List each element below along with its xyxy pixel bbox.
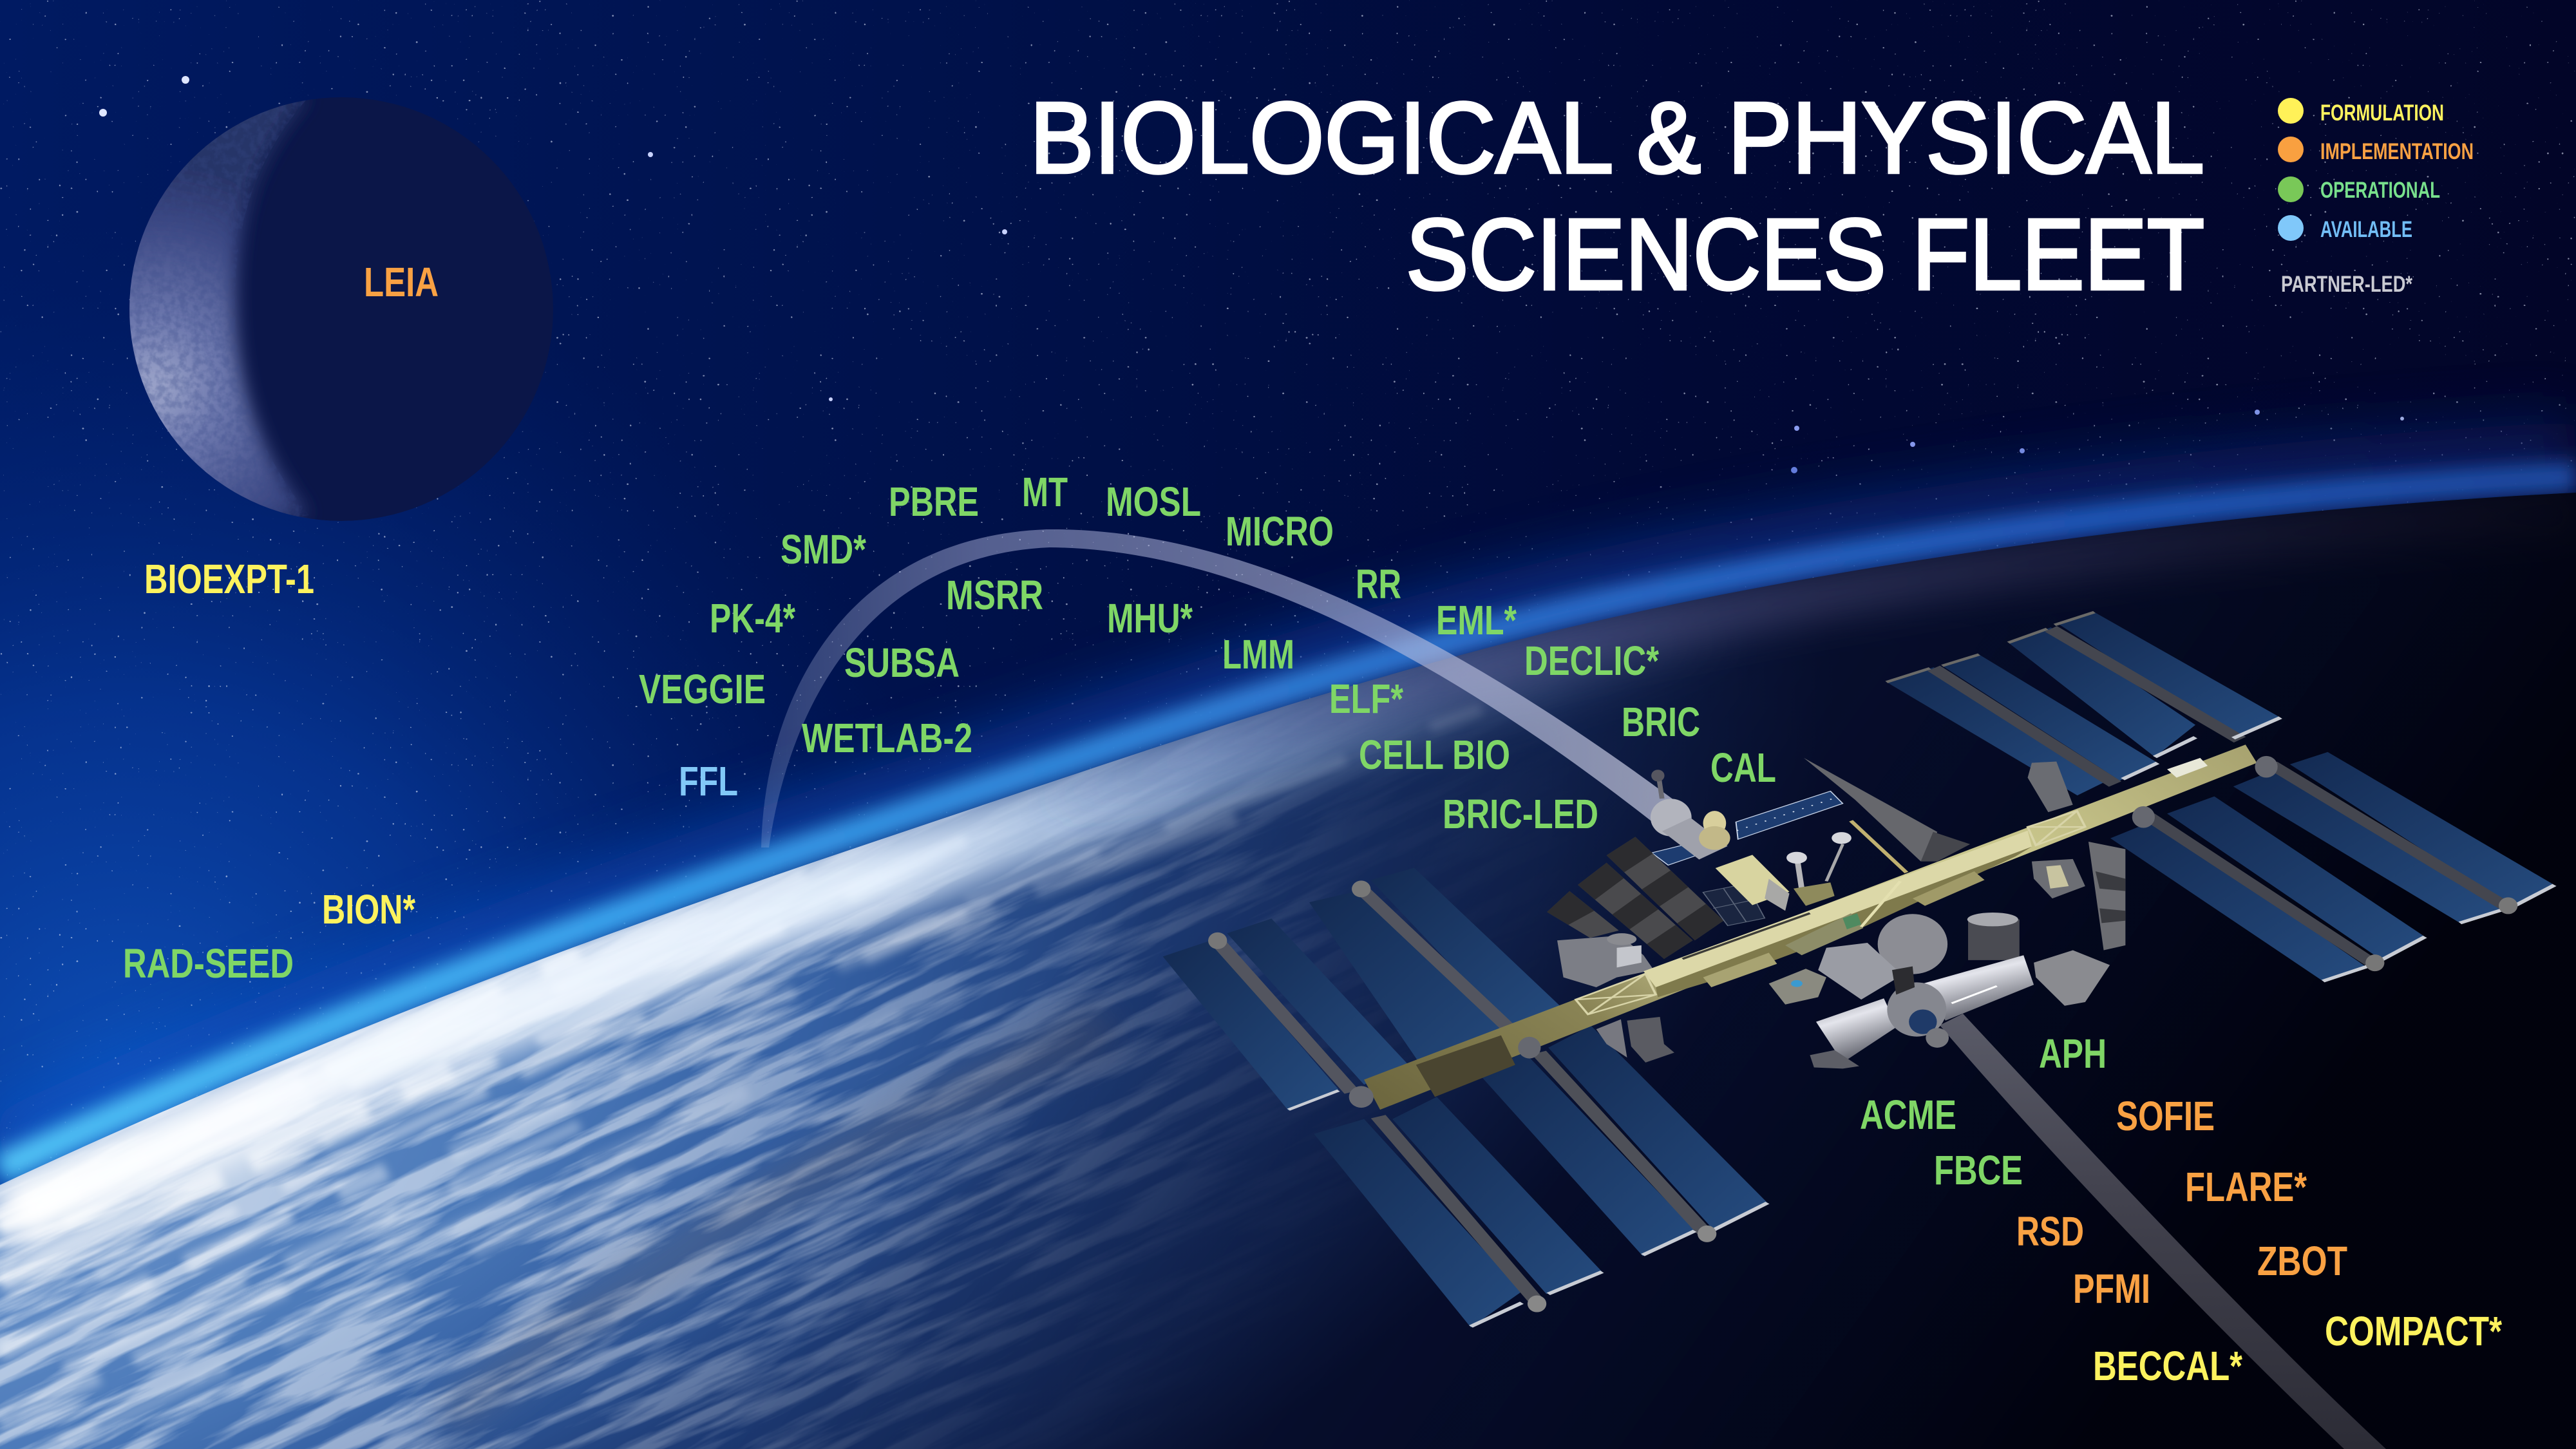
russian segment modules bbox=[1651, 770, 1789, 911]
moon craters texture bbox=[116, 84, 335, 535]
cloud streaks bbox=[0, 708, 1481, 1444]
label DECLIC: DECLIC* bbox=[1524, 638, 1659, 684]
label CELL BIO: CELL BIO bbox=[1359, 732, 1510, 778]
legend: implementation: IMPLEMENTATION bbox=[2320, 139, 2474, 164]
solar array: rear upper right 1 bbox=[2009, 612, 2280, 757]
label FLARE: FLARE* bbox=[2185, 1164, 2307, 1210]
station solar arrays and truss bbox=[1163, 612, 2555, 1327]
russian solar wings bbox=[1652, 791, 1842, 865]
label LEIA: LEIA bbox=[364, 259, 439, 305]
legend: operational bbox=[2278, 176, 2440, 203]
earth clouds bbox=[0, 504, 2424, 1449]
label RR: RR bbox=[1356, 561, 1401, 607]
solar array: lower right 1 bbox=[2110, 797, 2425, 981]
atmosphere glow along the horizon bbox=[0, 457, 2576, 1169]
label MOSL: MOSL bbox=[1106, 478, 1201, 525]
solar array: lower left wing 1 upper bbox=[1163, 918, 1408, 1111]
left machinery bbox=[1557, 933, 1654, 987]
label ZBOT: ZBOT bbox=[2257, 1238, 2347, 1284]
title bbox=[1030, 82, 2204, 311]
label ACME: ACME bbox=[1860, 1092, 1956, 1138]
legend: implementation bbox=[2278, 137, 2474, 164]
label WETLAB-2: WETLAB-2 bbox=[802, 715, 972, 761]
station central modules bbox=[1547, 758, 2125, 1068]
label ELF: ELF* bbox=[1329, 676, 1403, 722]
label APH: APH bbox=[2039, 1030, 2107, 1077]
label BRIC: BRIC bbox=[1622, 699, 1700, 745]
title: BIOLOGICAL & PHYSICAL bbox=[1030, 82, 2204, 194]
orbit arc: upper segment bbox=[761, 529, 1681, 848]
solar array: lower right 2 bbox=[2233, 752, 2555, 923]
label MSRR: MSRR bbox=[946, 572, 1043, 618]
moon lit crescent bbox=[97, 64, 309, 547]
label BRIC-LED: BRIC-LED bbox=[1443, 791, 1598, 837]
label RAD-SEED: RAD-SEED bbox=[123, 940, 294, 987]
legend: available bbox=[2278, 215, 2412, 242]
solar array: rear upper right 2 bbox=[1886, 654, 2157, 795]
title: SCIENCES FLEET bbox=[1406, 198, 2204, 311]
label FFL: FFL bbox=[679, 758, 738, 804]
label COMPACT: COMPACT* bbox=[2325, 1308, 2502, 1354]
label SOFIE: SOFIE bbox=[2116, 1093, 2215, 1139]
right solar radiator bbox=[2088, 842, 2125, 951]
legend bbox=[2278, 98, 2474, 297]
label BECCAL: BECCAL* bbox=[2093, 1343, 2242, 1389]
legend: formulation: FORMULATION bbox=[2320, 100, 2444, 126]
label PK-4: PK-4* bbox=[710, 595, 795, 641]
label PFMI: PFMI bbox=[2073, 1265, 2150, 1312]
label PBRE: PBRE bbox=[889, 478, 979, 525]
orbit arc: lower segment bbox=[1940, 1014, 2386, 1449]
label SUBSA: SUBSA bbox=[844, 639, 960, 686]
label VEGGIE: VEGGIE bbox=[639, 666, 766, 712]
pressurized modules bbox=[1810, 943, 2110, 1068]
lower truss machinery bbox=[1596, 762, 2085, 1063]
label LMM: LMM bbox=[1222, 631, 1294, 677]
truss lattice segments bbox=[1576, 811, 2085, 1014]
label MICRO: MICRO bbox=[1226, 508, 1334, 554]
legend: operational: OPERATIONAL bbox=[2320, 178, 2440, 203]
label MT: MT bbox=[1022, 469, 1068, 515]
label BION: BION* bbox=[322, 886, 415, 933]
solar array: lower left wing 2 upper bbox=[1309, 868, 1562, 1075]
solar array: lower left wing 1 lower bbox=[1314, 1097, 1602, 1327]
label CAL: CAL bbox=[1710, 744, 1776, 791]
earth shadow on night side bbox=[0, 493, 2576, 1449]
solar array: lower left wing 2 lower bbox=[1477, 1025, 1768, 1256]
center truss bbox=[1643, 831, 2032, 997]
grey radiator panel bbox=[1804, 758, 1970, 862]
label FBCE: FBCE bbox=[1934, 1147, 2023, 1193]
inflatable and tank modules bbox=[1878, 913, 2020, 974]
legend: formulation bbox=[2278, 98, 2444, 126]
label RSD: RSD bbox=[2016, 1208, 2084, 1255]
dark radiator stack bbox=[1547, 837, 1723, 959]
label SMD: SMD* bbox=[781, 526, 866, 573]
small grid solar panel bbox=[1703, 884, 1765, 925]
mission labels bbox=[123, 259, 2502, 1389]
label BIOEXPT-1: BIOEXPT-1 bbox=[144, 556, 314, 602]
legend: available: AVAILABLE bbox=[2320, 217, 2412, 242]
legend: partner-led note: PARTNER-LED* bbox=[2281, 272, 2412, 297]
space station bbox=[1163, 612, 2555, 1327]
main truss ends bbox=[1349, 744, 2278, 1110]
label MHU: MHU* bbox=[1107, 595, 1193, 641]
antennas, dishes and crane bbox=[1786, 820, 1906, 927]
moon bbox=[129, 97, 553, 521]
label EML: EML* bbox=[1436, 597, 1517, 643]
